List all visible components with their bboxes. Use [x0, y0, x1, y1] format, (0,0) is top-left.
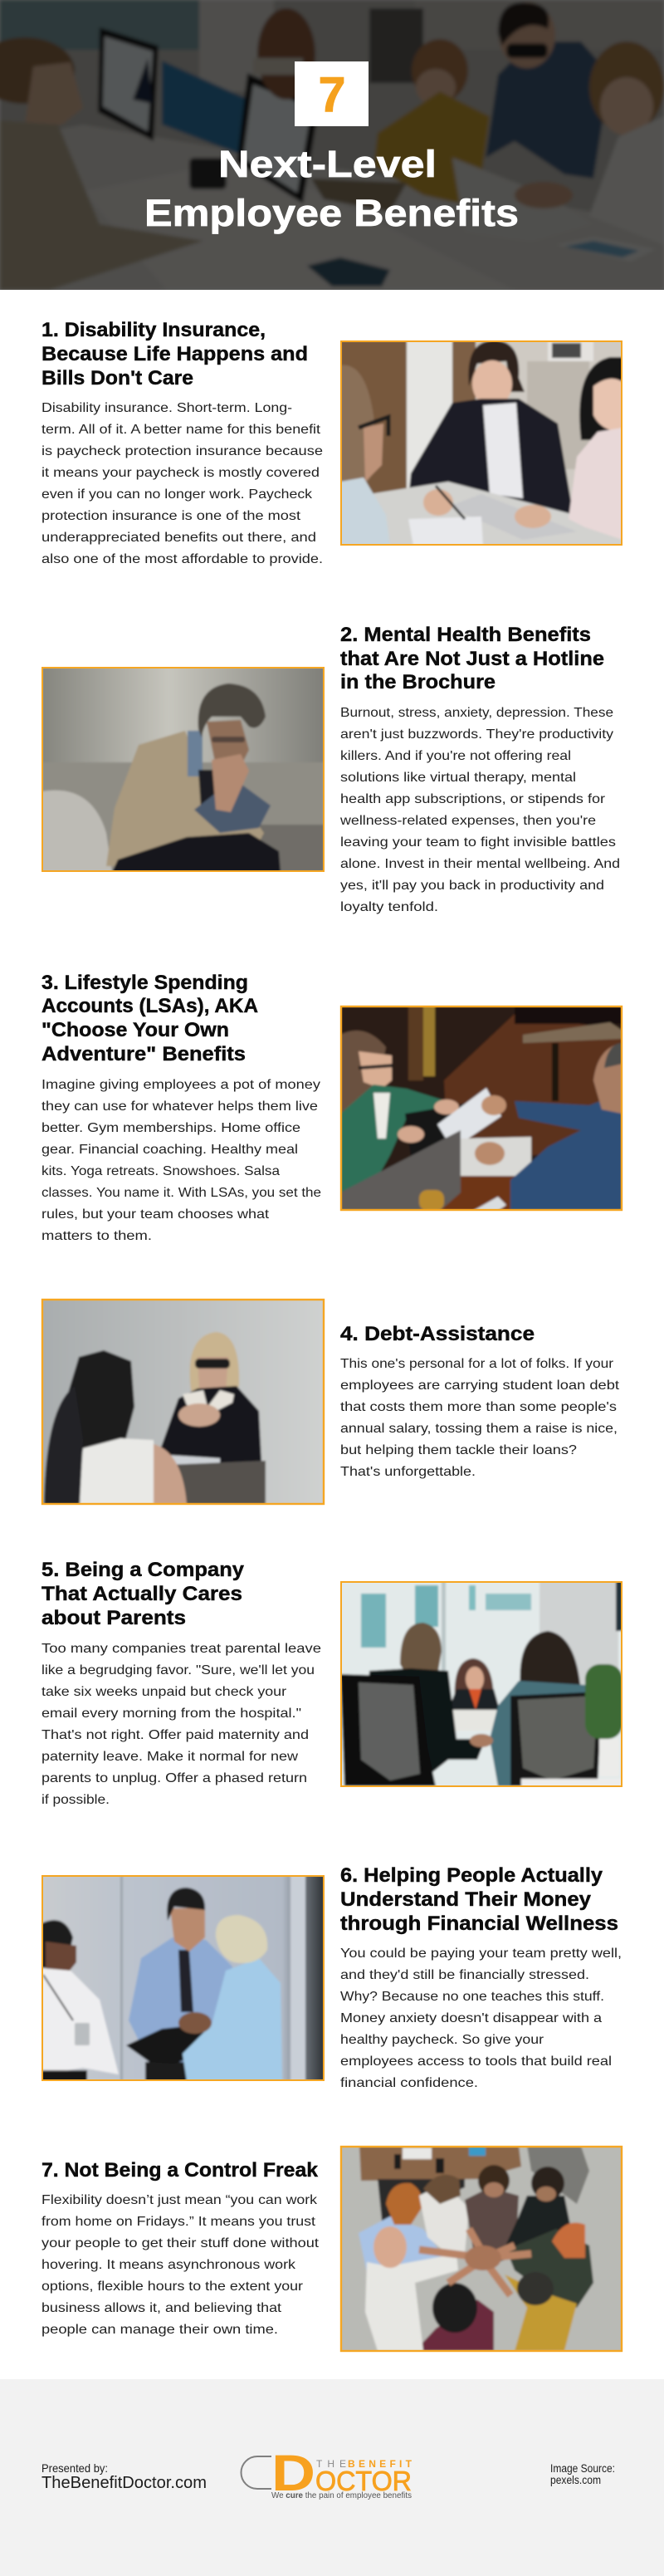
image source credit: pexels.com: [550, 2474, 601, 2486]
body text 6: Money anxiety doesn't disappear with a: [340, 2011, 602, 2025]
heading 5: That Actually Cares: [42, 1583, 242, 1605]
body text 4: but helping them tackle their loans?: [340, 1443, 577, 1457]
body text 4: [340, 1357, 620, 1479]
presented by credit: TheBenefitDoctor.com: [42, 2474, 207, 2492]
body text 7: hovering. It means asynchronous work: [42, 2258, 296, 2272]
body text 2: Burnout, stress, anxiety, depression. These: [340, 706, 613, 720]
number badge: 7: [319, 67, 345, 122]
panel: benefit 7: [42, 2146, 622, 2352]
body text 5: [42, 1642, 321, 1807]
body text 2: killers. And if you're not offering real: [340, 749, 571, 763]
heading 3: Accounts (LSAs), AKA: [42, 995, 258, 1017]
body text 6: healthy paycheck. So give your: [340, 2033, 544, 2047]
logo: The Benefit Doctor: THE: [316, 2458, 346, 2470]
body text 4: That's unforgettable.: [340, 1465, 476, 1479]
title: Employee Benefits: [144, 192, 519, 234]
heading 5: 5. Being a Company: [42, 1559, 244, 1581]
heading 6: through Financial Wellness: [340, 1912, 618, 1935]
photo: stressed man on sofa: [42, 667, 325, 872]
body text 2: leaving your team to fight invisible battles: [340, 835, 616, 850]
heading 3: [42, 972, 258, 1065]
body text 5: paternity leave. Make it normal for new: [42, 1750, 298, 1764]
body text 2: [339, 706, 620, 914]
title: [144, 143, 519, 234]
body text 1: protection insurance is one of the most: [42, 509, 301, 523]
body text 5: That's not right. Offer paid maternity and: [42, 1728, 309, 1742]
body text 7: options, flexible hours to the extent your: [42, 2280, 304, 2294]
heading 7: 7. Not Being a Control Freak: [42, 2159, 318, 2182]
body text 1: is paycheck protection insurance because: [42, 444, 323, 458]
body text 6: Why? Because no one teaches this stuff.: [340, 1990, 604, 2004]
image source credit: [550, 2462, 615, 2486]
body text 7: business allows it, and believing that: [42, 2301, 282, 2315]
body text 7: people can manage their own time.: [42, 2323, 278, 2337]
body text 3: Imagine giving employees a pot of money: [42, 1078, 320, 1092]
image source credit: Image Source:: [550, 2462, 615, 2475]
logo: The Benefit Doctor: OCTOR: [315, 2466, 412, 2496]
body text 1: also one of the most affordable to provide.: [42, 552, 323, 566]
heading 5: [42, 1559, 244, 1629]
body text 2: wellness-related expenses, then you're: [339, 814, 596, 828]
body text 2: loyalty tenfold.: [340, 900, 438, 914]
body text 6: employees access to tools that build real: [340, 2054, 612, 2069]
heading 6: Understand Their Money: [340, 1888, 591, 1911]
heading 3: Adventure" Benefits: [42, 1043, 246, 1065]
body text 1: underappreciated benefits out there, and: [42, 531, 316, 545]
heading 6: [340, 1864, 618, 1935]
heading 1: 1. Disability Insurance,: [42, 319, 266, 341]
heading 3: 3. Lifestyle Spending: [42, 972, 248, 994]
body text 3: [42, 1078, 321, 1243]
body text 1: even if you can no longer work. Paycheck: [42, 487, 313, 502]
photo: couple meeting with an advisor: [340, 1581, 622, 1787]
body text 2: health app subscriptions, or stipends for: [340, 792, 606, 806]
body text 5: email every morning from the hospital.": [42, 1707, 301, 1721]
logo: The Benefit Doctor: We cure the pain of employee benefits: [271, 2491, 412, 2500]
photo: colleagues shaking hands: [42, 1875, 325, 2081]
body text 5: if possible.: [42, 1793, 110, 1807]
heading 1: Because Life Happens and: [42, 343, 308, 365]
footer: [0, 2379, 664, 2576]
heading 2: in the Brochure: [340, 671, 496, 693]
header background photo: team at desks: [0, 0, 664, 290]
panel: benefit 1: [42, 319, 622, 566]
logo: The Benefit Doctor: BENEFIT: [348, 2458, 413, 2470]
panel: benefit 3: [42, 972, 622, 1243]
body text 7: from home on Fridays.” It means you trust: [42, 2215, 316, 2229]
body text 6: financial confidence.: [340, 2076, 478, 2090]
body text 5: like a begrudging favor. "Sure, we'll let you: [42, 1663, 315, 1677]
body text 7: your people to get their stuff done without: [42, 2236, 320, 2250]
body text 3: classes. You name it. With LSAs, you set the: [42, 1186, 321, 1200]
body text 2: solutions like virtual therapy, mental: [340, 771, 576, 785]
heading 2: that Are Not Just a Hotline: [340, 648, 604, 670]
body text 1: [42, 401, 323, 566]
body text 2: yes, it'll pay you back in productivity and: [340, 879, 604, 893]
heading 2: [340, 624, 604, 693]
presented by credit: Presented by:: [42, 2461, 108, 2475]
body text 5: take six weeks unpaid but check your: [42, 1685, 287, 1699]
title: Next-Level: [218, 143, 437, 185]
body text 4: annual salary, tossing them a raise is nice,: [340, 1422, 618, 1436]
body text 3: kits. Yoga retreats. Snowshoes. Salsa: [42, 1164, 280, 1178]
heading 3: "Choose Your Own: [42, 1019, 229, 1041]
body text 5: parents to unplug. Offer a phased return: [42, 1771, 307, 1785]
body text 1: it means your paycheck is mostly covered: [42, 466, 320, 480]
panel: benefit 6: [42, 1864, 622, 2090]
heading 6: 6. Helping People Actually: [340, 1864, 603, 1887]
body text 3: rules, but your team chooses what: [42, 1207, 270, 1222]
body text 3: better. Gym memberships. Home office: [42, 1121, 300, 1135]
logo: The Benefit Doctor: [241, 2445, 413, 2501]
heading 4: 4. Debt-Assistance: [340, 1323, 535, 1345]
body text 1: term. All of it. A better name for this benefit: [42, 423, 321, 437]
body text 4: that costs them more than some people's: [340, 1400, 617, 1414]
body text 2: aren't just buzzwords. They're productivity: [340, 727, 613, 742]
body text 3: matters to them.: [42, 1229, 152, 1243]
body text 4: employees are carrying student loan debt: [340, 1379, 620, 1393]
body text 1: Disability insurance. Short-term. Long-: [42, 401, 292, 415]
body text 5: Too many companies treat parental leave: [42, 1642, 321, 1656]
body text 4: This one's personal for a lot of folks. If your: [340, 1357, 614, 1371]
heading 1: Bills Don't Care: [42, 367, 193, 389]
presented by credit: [42, 2461, 207, 2492]
photo: advisor signing paperwork: [340, 340, 622, 546]
body text 6: You could be paying your team pretty well,: [340, 1947, 622, 1961]
number badge: [295, 61, 369, 126]
body text 3: they can use for whatever helps them live: [42, 1099, 318, 1114]
heading 2: 2. Mental Health Benefits: [340, 624, 591, 646]
photo: interview with a blonde manager: [42, 1299, 325, 1505]
panel: benefit 4: [42, 1299, 620, 1505]
body text 7: [42, 2193, 320, 2337]
header banner: [0, 0, 664, 290]
body text 6: and they'd still be financially stressed.: [340, 1968, 589, 1982]
body text 6: [340, 1947, 622, 2090]
body text 2: alone. Invest in their mental wellbeing. And: [340, 857, 620, 871]
panel: benefit 5: [42, 1559, 622, 1807]
body text 3: gear. Financial coaching. Healthy meal: [42, 1143, 298, 1157]
heading 5: about Parents: [42, 1607, 186, 1629]
logo: The Benefit Doctor: D: [271, 2445, 315, 2501]
body text 7: Flexibility doesn’t just mean “you can work: [42, 2193, 318, 2207]
photo: team hands stacked in a circle: [340, 2146, 622, 2352]
panel: benefit 2: [42, 624, 620, 914]
photo: exchanging a document at a table: [340, 1006, 622, 1211]
heading 1: [42, 319, 308, 389]
